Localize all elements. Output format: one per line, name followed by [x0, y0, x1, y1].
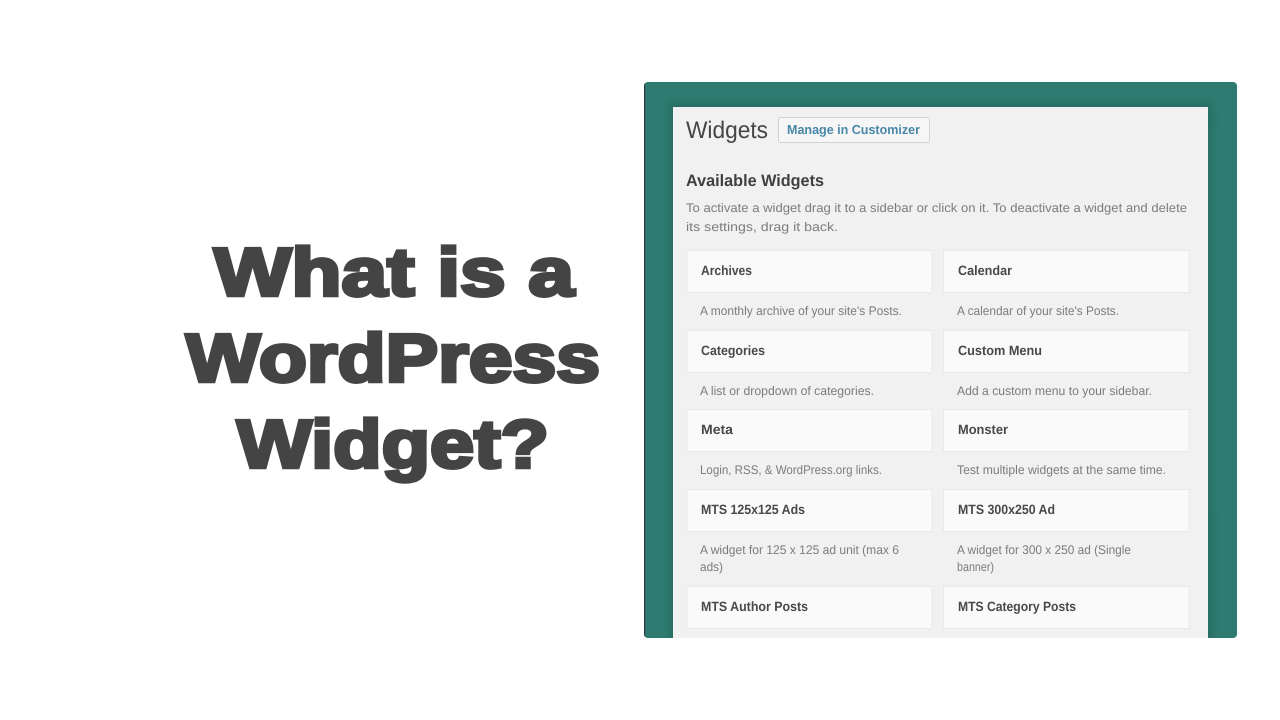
title: WordPress	[186, 320, 600, 396]
widget: meta	[687, 410, 932, 477]
widgets page	[673, 107, 1208, 647]
widget: monster: Test multiple widgets at the same time.	[957, 463, 1166, 477]
widget: archives	[687, 250, 932, 318]
widget: custom menu: Custom Menu	[958, 343, 1042, 358]
widget: custom menu: Add a custom menu to your sidebar.	[957, 384, 1152, 398]
widget: meta: Login, RSS, & WordPress.org links.	[700, 463, 882, 477]
title: Widget?	[237, 406, 549, 482]
title: What is a	[214, 234, 575, 310]
widget: mts 125x125 ads	[687, 490, 932, 574]
widget: meta: Meta	[701, 422, 734, 437]
widget: mts 125x125 ads: ads)	[700, 560, 723, 574]
widget: mts 300x250 ad: banner)	[957, 560, 994, 574]
widget: mts 125x125 ads: A widget for 125 x 125 ad unit (max 6	[700, 543, 899, 557]
widget: calendar: Calendar	[958, 263, 1013, 278]
widget: categories: A list or dropdown of categories.	[700, 384, 874, 398]
section description	[686, 201, 1187, 234]
button: manage in customizer: Manage in Customizer	[787, 122, 920, 137]
panel: widgets screenshot	[644, 82, 1237, 648]
widget: calendar	[944, 250, 1189, 318]
section description: To activate a widget drag it to a sidebar or click on it. To deactivate a widget and delete	[686, 201, 1187, 215]
widget: archives: A monthly archive of your site's Posts.	[700, 304, 902, 318]
widget: categories: Categories	[701, 343, 765, 358]
button: manage in customizer	[778, 118, 930, 142]
widget: mts category posts	[944, 586, 1189, 628]
teal frame	[644, 82, 1237, 638]
widget: archives: Archives	[701, 263, 752, 278]
widget: monster	[944, 410, 1189, 477]
title	[186, 234, 600, 482]
widget: mts 300x250 ad: A widget for 300 x 250 ad (Single	[957, 543, 1131, 557]
widget: mts 300x250 ad: MTS 300x250 Ad	[958, 502, 1055, 517]
widget: mts author posts: MTS Author Posts	[701, 599, 808, 614]
widget: mts category posts: MTS Category Posts	[958, 599, 1076, 614]
widget: monster: Monster	[958, 422, 1009, 437]
widget: mts author posts	[687, 586, 932, 628]
page heading: Widgets	[686, 117, 768, 144]
widget: custom menu	[944, 330, 1189, 398]
widget: categories	[687, 330, 932, 398]
section description: its settings, drag it back.	[686, 220, 838, 234]
section heading: Available Widgets	[686, 172, 824, 190]
widget: mts 125x125 ads: MTS 125x125 Ads	[701, 502, 805, 517]
widget: calendar: A calendar of your site's Posts.	[957, 304, 1119, 318]
widget: mts 300x250 ad	[944, 490, 1189, 574]
